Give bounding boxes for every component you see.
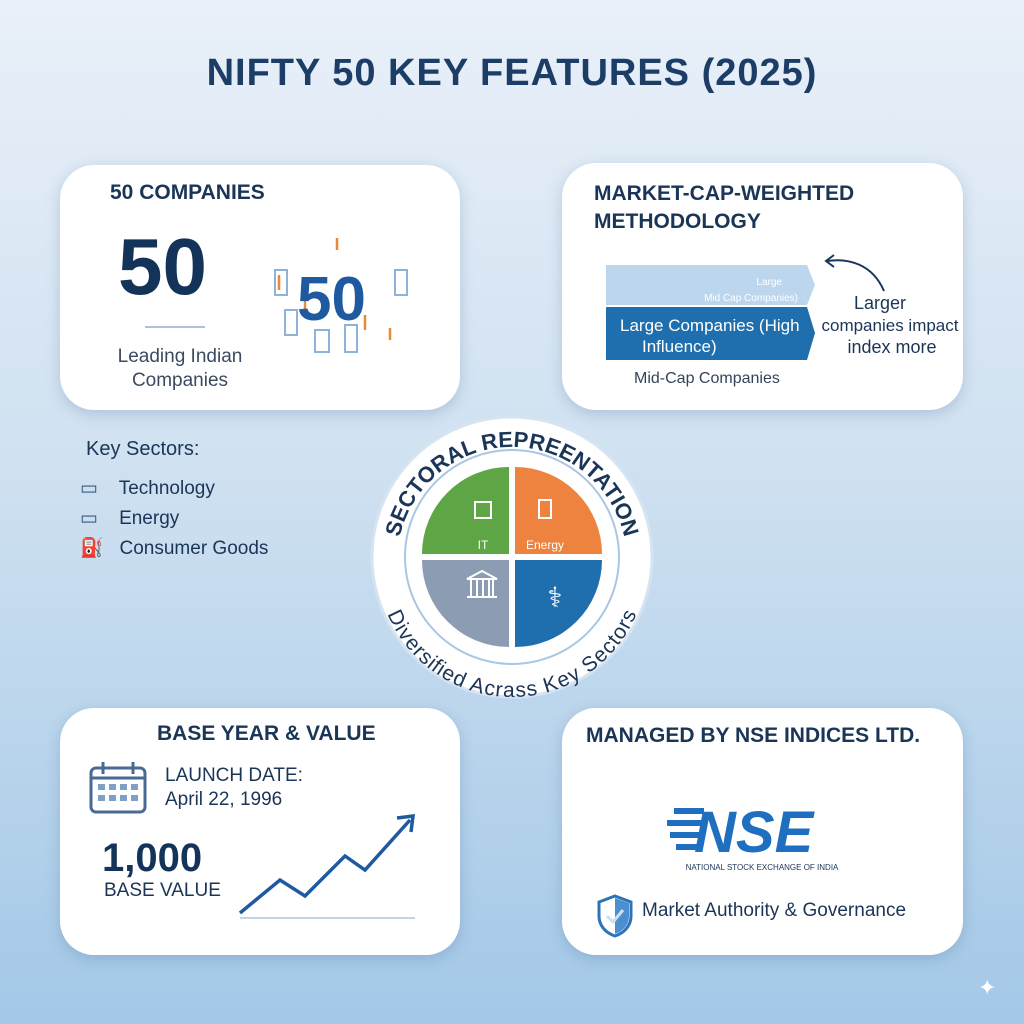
- sectoral representation circle: ⚕: [547, 581, 563, 614]
- sparkle icon: ✦: [978, 975, 996, 1000]
- bar diagram: Large: [756, 277, 782, 288]
- launch date: [165, 765, 303, 810]
- text: leading indian companies: Companies: [132, 370, 228, 391]
- sectoral representation circle: Diversified Acrass Key Sectors: [388, 609, 636, 698]
- sectoral representation circle: SECTORAL REPREENTATION: [386, 432, 639, 536]
- big number: 50: [118, 222, 207, 311]
- heading: 50 COMPANIES: [110, 181, 265, 204]
- panel: base year & value: BASE VALUE: [104, 880, 221, 901]
- text: leading indian companies: [118, 346, 242, 391]
- title: NIFTY 50 KEY FEATURES (2025): [207, 52, 817, 94]
- base value: 1,000: [102, 836, 202, 880]
- key sectors list: ▭ Technology: [80, 478, 215, 499]
- bar diagram: Mid-Cap Companies: [634, 370, 780, 387]
- text: market authority: Market Authority & Governance: [642, 900, 906, 921]
- bar diagram: Mid Cap Companies): [704, 293, 798, 304]
- bar diagram: Influence): [642, 337, 717, 356]
- launch date: April 22, 1996: [165, 789, 282, 810]
- heading: MANAGED BY NSE INDICES LTD.: [586, 724, 920, 747]
- panel: managed by NSE: [562, 708, 963, 955]
- heading: METHODOLOGY: [594, 210, 761, 233]
- key sectors list: ⛽ Consumer Goods: [80, 538, 268, 559]
- heading: Key Sectors:: [86, 438, 199, 460]
- NSE logo: NATIONAL STOCK EXCHANGE OF INDIA: [686, 863, 839, 872]
- bar diagram: index more: [847, 337, 937, 357]
- bar diagram: Larger: [854, 293, 906, 313]
- key sectors list: [80, 438, 268, 559]
- bar diagram: companies impact: [821, 316, 959, 335]
- bar diagram: Large Companies (High: [620, 316, 800, 335]
- sectoral representation circle: [370, 418, 654, 698]
- heading: MARKET-CAP-WEIGHTED: [594, 182, 854, 205]
- icon: shield: [598, 894, 632, 938]
- icon: 50 with buildings: [274, 238, 408, 353]
- sectoral representation circle: IT: [478, 538, 489, 552]
- bar diagram: [606, 254, 959, 387]
- text: leading indian companies: Leading Indian: [118, 346, 242, 367]
- sectoral representation circle: Energy: [526, 538, 564, 552]
- panel: 50 companies: [60, 165, 460, 410]
- key sectors list: ▭ Energy: [80, 508, 179, 529]
- heading: BASE YEAR & VALUE: [157, 722, 376, 745]
- icon: 50 with buildings: 50: [297, 265, 366, 334]
- heading: [594, 182, 854, 233]
- NSE logo: NSE: [694, 800, 816, 865]
- icon: calendar: [90, 762, 146, 814]
- panel: market cap weighted: [562, 163, 963, 410]
- chart: rising line: [238, 814, 415, 919]
- NSE logo: [667, 800, 839, 872]
- launch date: LAUNCH DATE:: [165, 765, 303, 786]
- panel: base year & value: [60, 708, 460, 955]
